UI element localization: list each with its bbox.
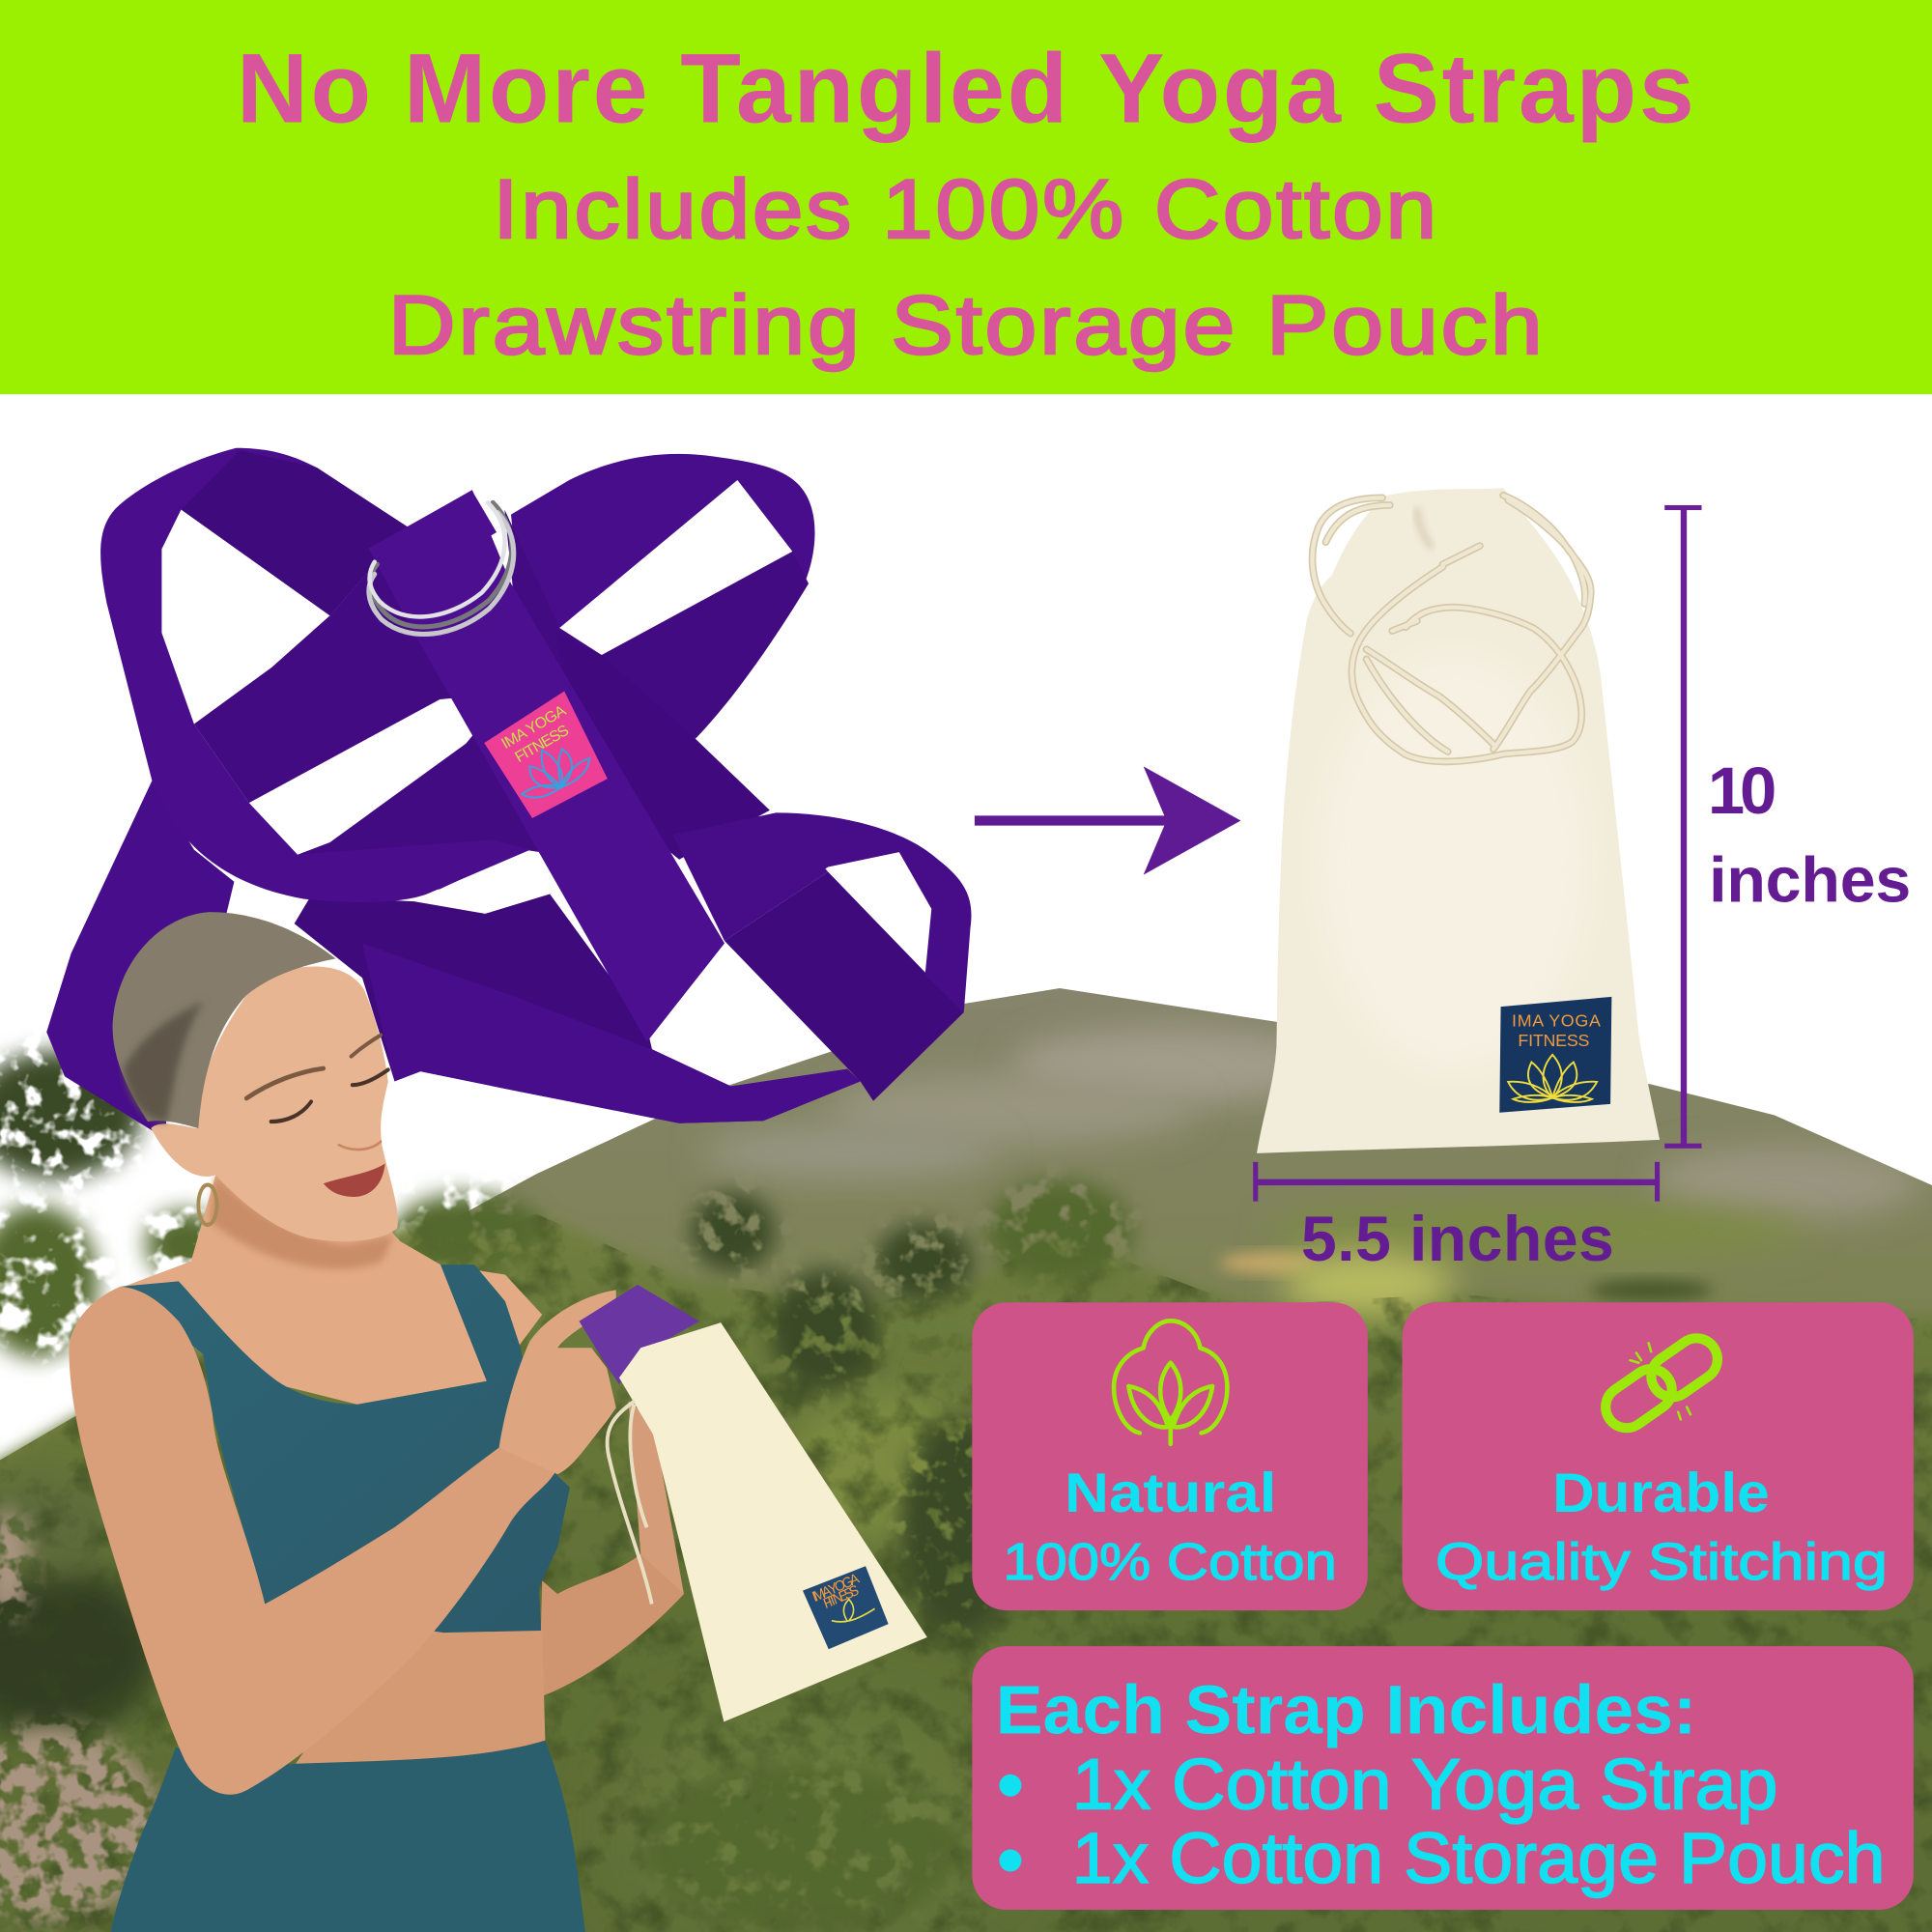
pink strap label: IMA YOGA: [498, 702, 569, 753]
pouch cord: [608, 1401, 652, 1604]
strap loop flap: [368, 491, 497, 589]
width dimension line: [1253, 1162, 1660, 1202]
arrow pointing to pouch: [975, 766, 1240, 875]
small pouch label: IMA YOGA: [810, 1571, 862, 1605]
leggings: [111, 1741, 585, 1932]
background: photo scene with sky, mountain and vegetation: [0, 988, 1932, 1932]
eyes and eyebrows: [246, 1036, 388, 1150]
hair: [113, 912, 336, 1128]
face: [151, 967, 398, 1241]
trees and bushes: [0, 1051, 1133, 1932]
height label: 10: [1708, 753, 1776, 828]
woman holding pouch: [69, 912, 927, 1932]
panel: durable stitching: [1403, 1302, 1914, 1610]
header banner: [0, 0, 1932, 394]
headline line 1: No More Tangled Yoga Straps: [237, 33, 1696, 143]
earring: [198, 1185, 216, 1225]
tank top: [120, 1264, 570, 1633]
neck and chest: [120, 1175, 542, 1405]
icon: cotton boll: [1114, 1321, 1227, 1444]
panel text: 100% Cotton: [1003, 1534, 1337, 1591]
panel heading: Each Strap Includes:: [996, 1672, 1696, 1749]
icon: chain link: [1598, 1330, 1725, 1436]
pink strap label: FITNESS: [512, 723, 572, 766]
far hand: [629, 1401, 684, 1594]
rolled strap: [579, 1285, 699, 1384]
drawstring cords: [1312, 496, 1591, 761]
pouch held by woman: [619, 1322, 927, 1721]
D-rings: [369, 502, 514, 634]
panel heading: Durable: [1552, 1463, 1770, 1524]
panel heading: Natural: [1065, 1463, 1276, 1524]
storage pouch product: [1257, 488, 1660, 1153]
pink strap label: [484, 692, 608, 818]
near arm: [69, 1287, 557, 1795]
width label: 5.5 inches: [1301, 1204, 1614, 1275]
height dimension line: [1664, 505, 1701, 1149]
list item: strap: 1x Cotton Yoga Strap: [1072, 1744, 1778, 1824]
height label: [1708, 753, 1911, 917]
pouch label: FITNESS: [1518, 1031, 1590, 1050]
stomach: [296, 1631, 545, 1764]
panel: each strap includes: [972, 1646, 1914, 1910]
headline line 3: Drawstring Storage Pouch: [388, 278, 1545, 372]
pouch label: IMA YOGA: [1512, 1010, 1601, 1030]
pouch label: [1499, 997, 1611, 1113]
small pouch label: FITNESS: [821, 1582, 862, 1612]
hand: [499, 1290, 616, 1474]
purple yoga strap with D-rings: [46, 448, 971, 1141]
small pouch label: [803, 1566, 889, 1649]
height label: inches: [1709, 845, 1911, 917]
panel: natural cotton: [972, 1302, 1368, 1610]
list item: pouch: 1x Cotton Storage Pouch: [1072, 1818, 1886, 1898]
far arm: [539, 1488, 684, 1697]
panel text: Quality Stitching: [1435, 1534, 1888, 1591]
headline line 2: Includes 100% Cotton: [493, 162, 1439, 256]
mouth: [324, 1163, 385, 1197]
